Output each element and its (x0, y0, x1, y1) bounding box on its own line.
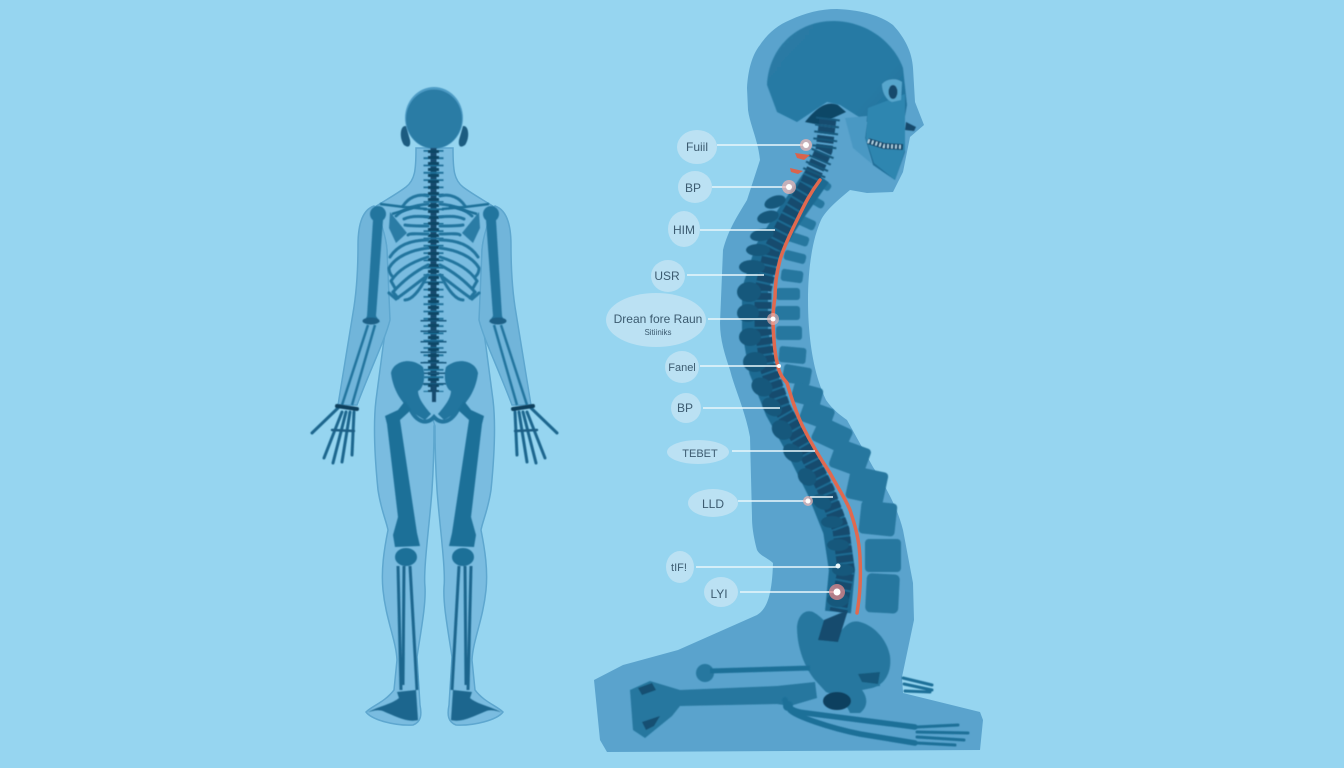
rib cage (389, 195, 479, 300)
vertebral bodies (775, 174, 901, 614)
label: LYI (704, 577, 738, 607)
label: BP lower: BP (677, 401, 693, 415)
arm bones (342, 206, 527, 405)
shoulder blades and collarbones (380, 204, 489, 243)
label: LLD (688, 489, 738, 517)
red disc accents (790, 153, 810, 174)
label: BP lower (671, 393, 701, 423)
label: BP upper (678, 171, 712, 203)
label: Drean fore Raun: Drean fore Raun (614, 312, 702, 326)
label: BP upper: BP (685, 181, 701, 195)
label: USR (651, 260, 685, 292)
side silhouette (594, 9, 983, 752)
spinal cord (773, 180, 860, 613)
glowing markers (767, 139, 845, 600)
spinal column and processes (737, 118, 854, 612)
spine, back view (430, 148, 436, 392)
label: Fanel: Fanel (668, 362, 696, 374)
label: tIF!: tIF! (671, 562, 687, 574)
pelvis (391, 361, 478, 422)
label: Drean fore Raun (606, 293, 706, 347)
callout lines (687, 145, 838, 592)
hands (312, 406, 557, 463)
skull (767, 21, 916, 180)
label: TEBET (667, 440, 729, 464)
leg bones (368, 401, 501, 721)
label: tIF! (666, 551, 694, 583)
label: HIM: HIM (673, 223, 695, 237)
figure: side view with spine (594, 9, 983, 752)
label: TEBET: TEBET (682, 448, 718, 460)
head (401, 87, 468, 149)
pelvis, side view (797, 610, 890, 713)
figure: full body skeleton, back view (312, 87, 557, 725)
label: HIM (668, 211, 700, 247)
label: Fuiil: Fuiil (686, 140, 708, 154)
lower arm bones and hand (783, 678, 968, 745)
body silhouette (366, 148, 503, 725)
label: LYI: LYI (710, 587, 728, 601)
femur (630, 681, 817, 738)
label: USR: USR (654, 269, 680, 283)
arms (338, 206, 531, 405)
label: LLD: LLD (702, 497, 724, 511)
thin leg bone (696, 664, 810, 682)
label: Fuiil (677, 130, 717, 164)
label: Fanel (665, 351, 699, 383)
label: Drean fore Raun: Sitiiniks (644, 328, 672, 337)
